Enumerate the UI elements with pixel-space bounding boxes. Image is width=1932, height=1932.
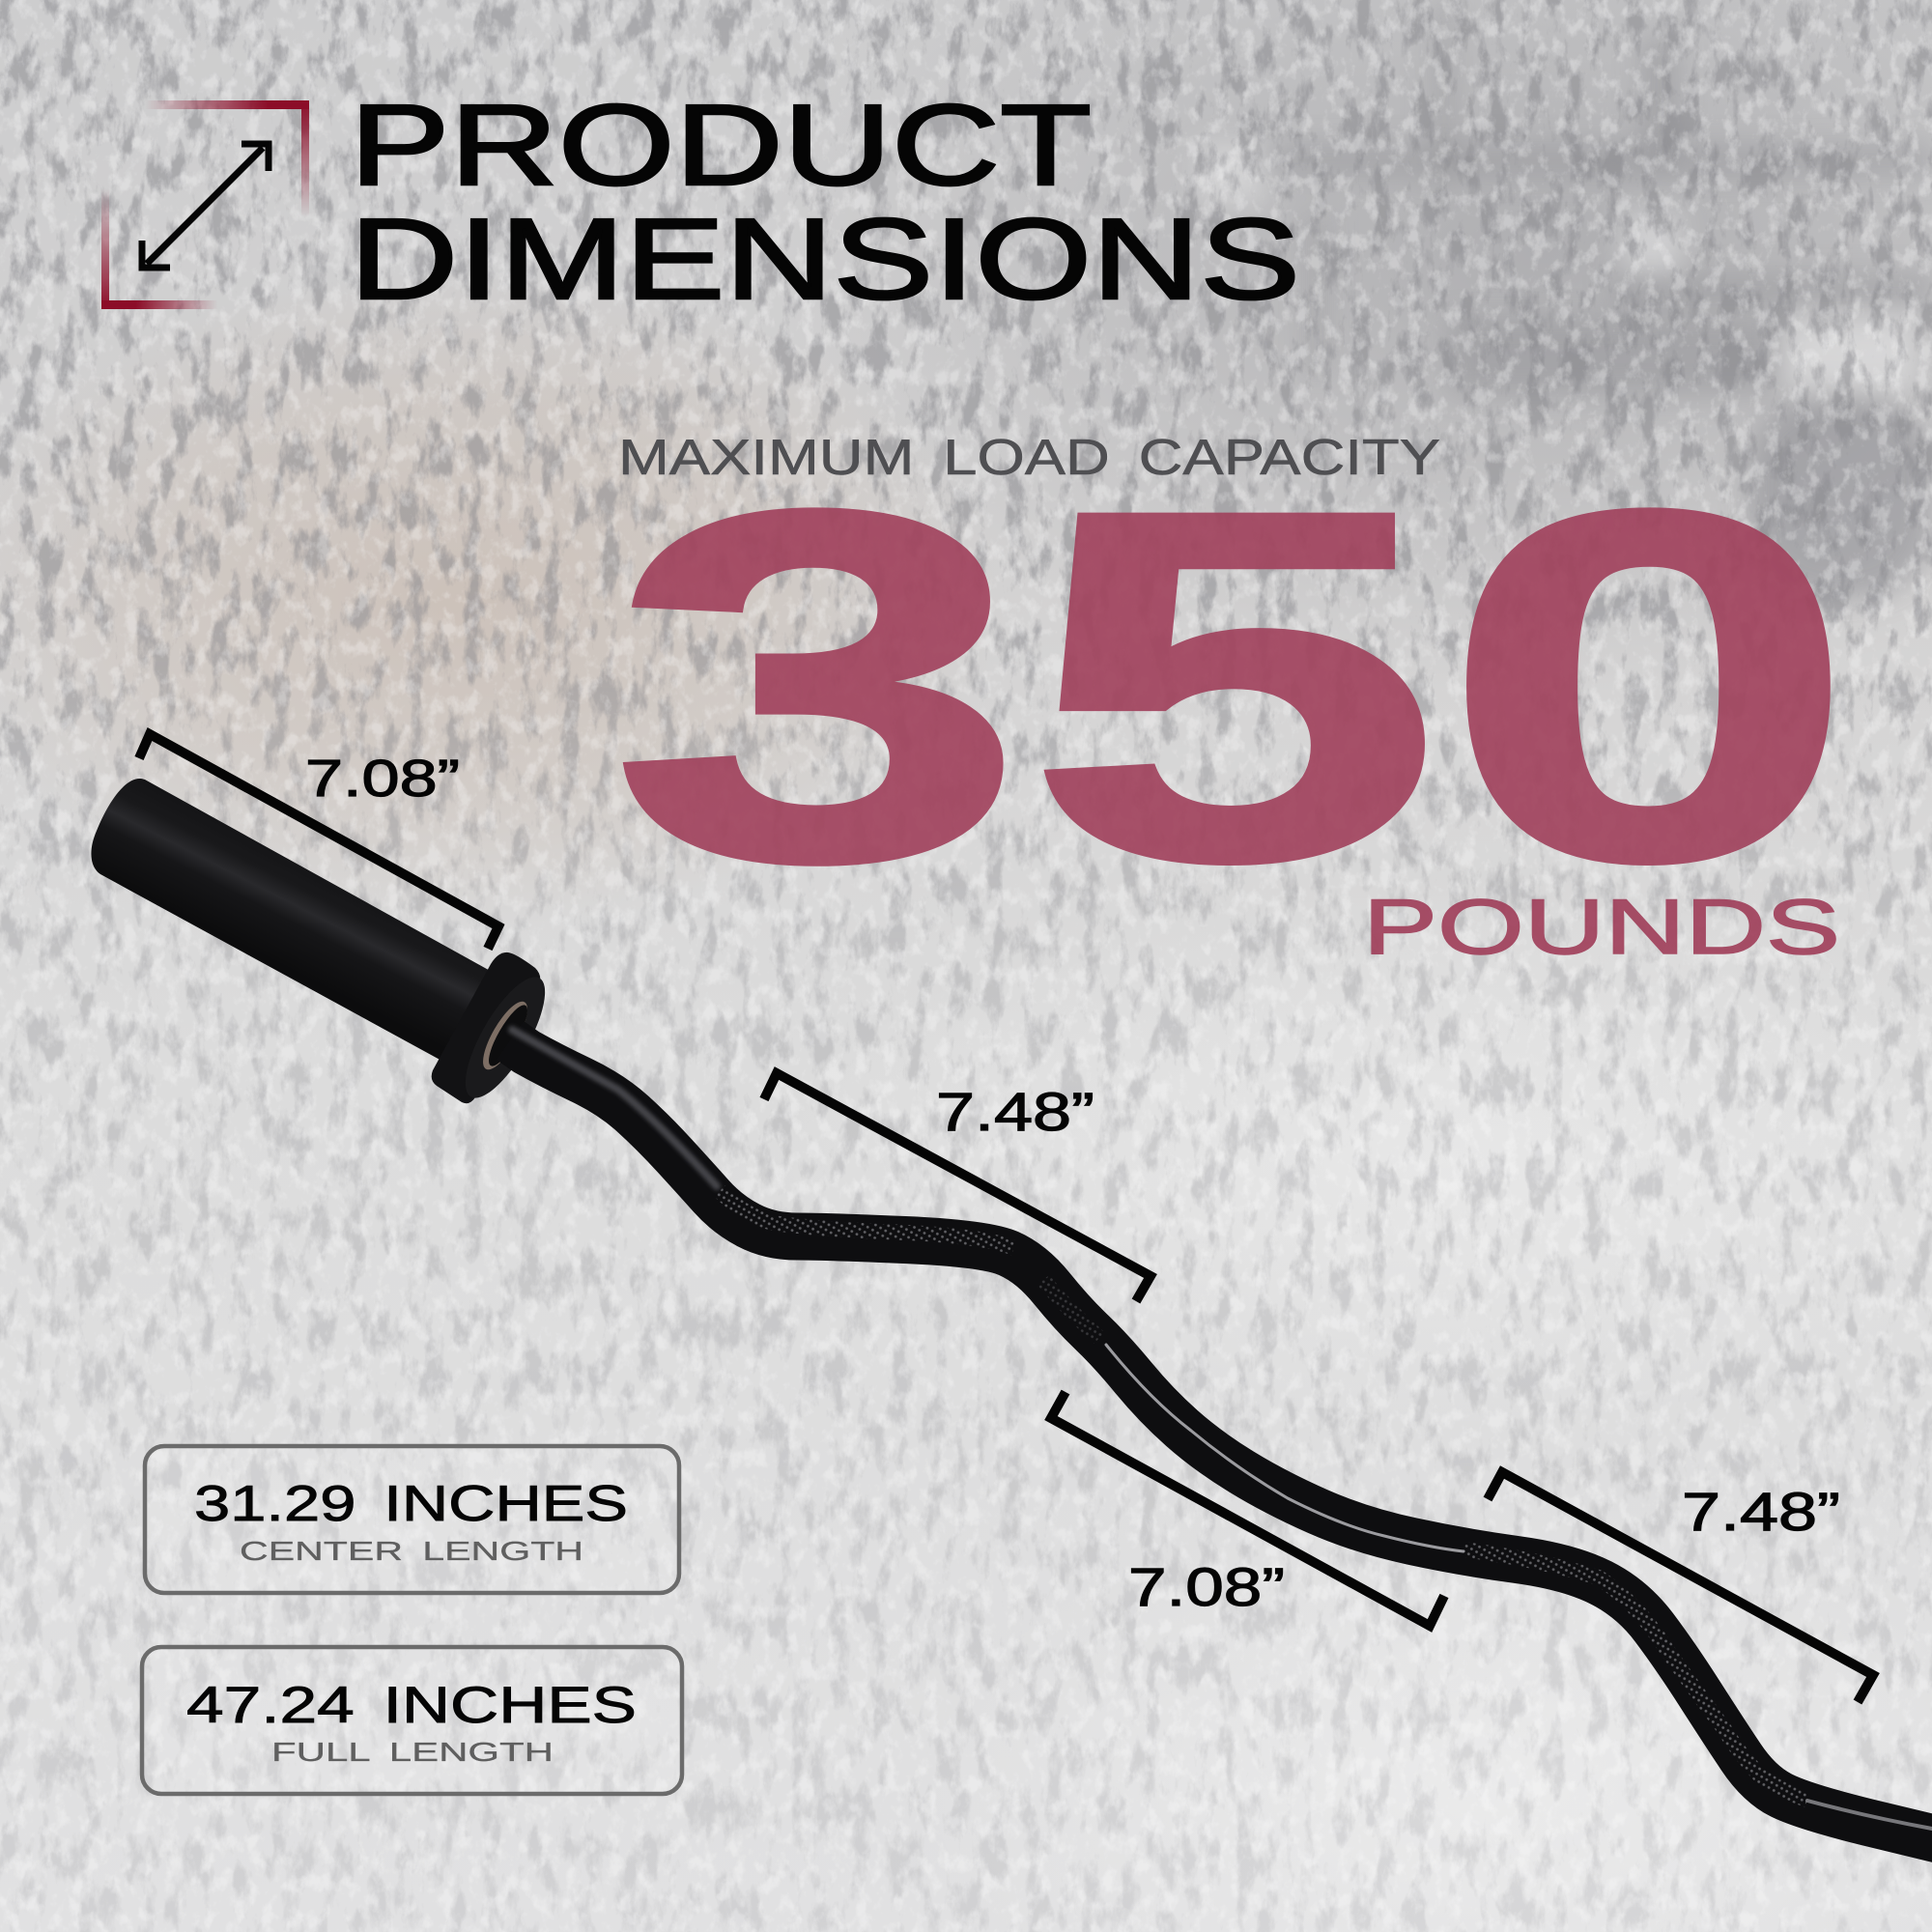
label: 7.48 first grip: 7.48” [936, 1081, 1094, 1142]
dimension bracket: sleeve length [139, 734, 498, 949]
panel: center length [145, 1446, 679, 1593]
value: 31.29 inches: 31.29 INCHES [194, 1476, 628, 1532]
title [350, 81, 1300, 324]
dimension bracket: first grip [764, 1073, 1151, 1301]
label: maximum load capacity: MAXIMUM LOAD CAPACITY [618, 430, 1440, 486]
bar highlights [512, 1030, 1932, 1829]
label: 7.08 center: 7.08” [1128, 1556, 1285, 1617]
title: DIMENSIONS [350, 195, 1300, 324]
barbell [91, 779, 1932, 1839]
big number 350: 350 [611, 409, 1857, 964]
label: 7.48 second grip: 7.48” [1682, 1481, 1840, 1542]
knurled grips [720, 1191, 1807, 1800]
caption: center length: CENTER LENGTH [240, 1536, 583, 1566]
label: pounds: POUNDS [1363, 884, 1840, 971]
collar [432, 952, 559, 1108]
bar shaft [510, 1040, 1932, 1839]
panel: full length [142, 1647, 682, 1794]
sleeve [91, 779, 502, 1067]
caption: full length: FULL LENGTH [271, 1737, 554, 1767]
icon: dimensions frame with arrow [101, 100, 309, 309]
label: 7.08 sleeve: 7.08” [305, 750, 460, 808]
dimension bracket: second grip [1488, 1472, 1873, 1702]
dimension bracket: center smooth section [1051, 1392, 1444, 1626]
title: PRODUCT [350, 81, 1092, 210]
value: 47.24 inches: 47.24 INCHES [186, 1677, 637, 1734]
